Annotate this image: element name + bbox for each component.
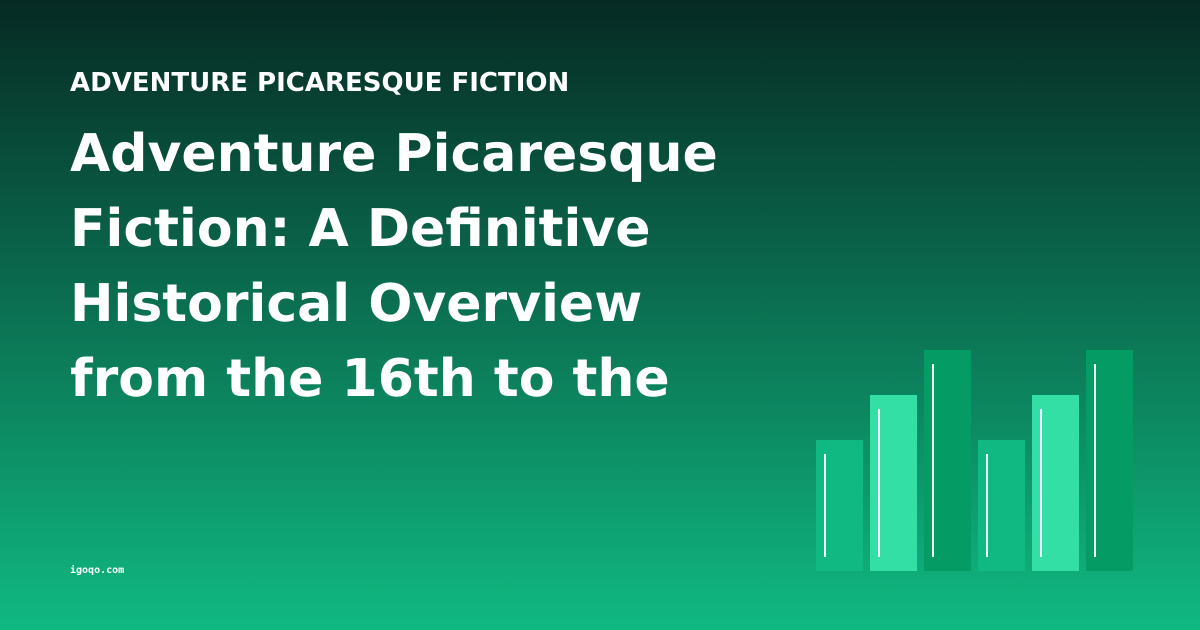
bar chart illustration — [816, 350, 1133, 571]
bar 4 — [978, 440, 1025, 571]
bar 2 — [870, 395, 917, 571]
bar 6 — [1086, 350, 1133, 571]
bar 5 — [1032, 395, 1079, 571]
bar 3 — [924, 350, 971, 571]
footer domain: igoqo.com — [70, 565, 124, 576]
title — [70, 124, 718, 409]
title: Adventure Picaresque — [70, 124, 718, 184]
title: from the 16th to the — [70, 349, 670, 409]
title: Historical Overview — [70, 274, 642, 334]
bar 1 — [816, 440, 863, 571]
eyebrow heading: ADVENTURE PICARESQUE FICTION — [70, 68, 569, 98]
title: Fiction: A Definitive — [70, 199, 651, 259]
